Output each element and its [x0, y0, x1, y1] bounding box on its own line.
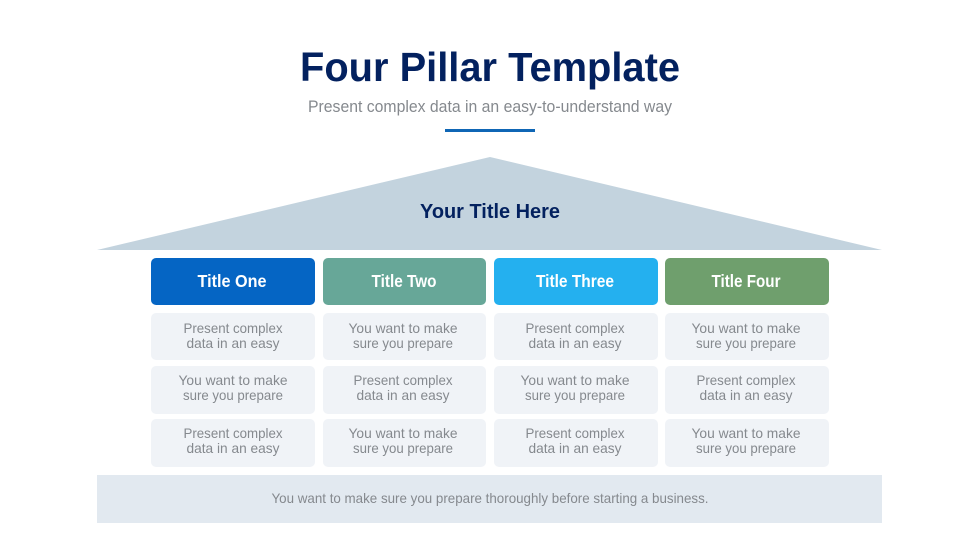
pillar 2 row 3 [323, 419, 486, 467]
pillar 2 [323, 258, 486, 467]
title: Four Pillar Template [300, 44, 680, 90]
pillar 2 row 3: You want to make [348, 425, 458, 441]
pillar 3 [494, 258, 658, 467]
pillar 2 row 3: sure you prepare [353, 440, 453, 456]
pillar 3 row 1: data in an easy [528, 335, 622, 351]
pillar 1 header: Title One [198, 271, 267, 291]
pillar 1 row 2 [151, 366, 315, 414]
pillar 3 row 1 [494, 313, 658, 360]
roof: main title [97, 157, 882, 250]
pillar 2 row 2: data in an easy [356, 387, 450, 403]
pillar 1 row 1 [151, 313, 315, 360]
pillar 4 row 3: You want to make [692, 425, 801, 441]
pillar 3 row 3: data in an easy [528, 440, 622, 456]
pillar 1 [151, 258, 315, 467]
pillar 3 header: Title Three [536, 271, 614, 291]
pillar 2 row 1: sure you prepare [353, 335, 453, 351]
pillar 2 row 1: You want to make [348, 320, 458, 336]
pillar 3 row 2 [494, 366, 658, 414]
pillar 3 row 1: Present complex [526, 320, 624, 336]
pillar 1 row 2: sure you prepare [183, 387, 283, 403]
foundation bar: You want to make sure you prepare thoroughly before starting a business. [272, 490, 708, 506]
pillar 4 row 1 [665, 313, 829, 360]
pillar 4 header: Title Four [712, 271, 781, 291]
pillar 4 header [665, 258, 829, 305]
pillar 3 row 2: sure you prepare [525, 387, 625, 403]
pillar 1 row 1: Present complex [184, 320, 282, 336]
pillar 4 row 1: You want to make [692, 320, 801, 336]
roof: main title: Your Title Here [420, 201, 560, 223]
pillar 3 header [494, 258, 658, 305]
pillar 3 row 3: Present complex [526, 425, 624, 441]
pillar 4 row 3: sure you prepare [696, 440, 796, 456]
pillar 4 row 2 [665, 366, 829, 414]
pillar 2 row 1 [323, 313, 486, 360]
pillar 2 header: Title Two [372, 271, 436, 291]
pillar 1 header [151, 258, 315, 305]
foundation bar [97, 475, 882, 523]
pillar 4 row 1: sure you prepare [696, 335, 796, 351]
pillar 3 row 3 [494, 419, 658, 467]
pillar 1 row 2: You want to make [178, 372, 288, 388]
subtitle: Present complex data in an easy-to-understand way [308, 98, 673, 116]
pillar 4 row 3 [665, 419, 829, 467]
pillar 4 row 2: data in an easy [700, 387, 792, 403]
pillar 1 row 1: data in an easy [186, 335, 280, 351]
pillar 2 row 2 [323, 366, 486, 414]
pillar 1 row 3: data in an easy [186, 440, 280, 456]
pillar 1 row 3: Present complex [184, 425, 282, 441]
pillar 4 [665, 258, 829, 467]
pillar 2 header [323, 258, 486, 305]
title underline [445, 129, 535, 132]
pillar 4 row 2: Present complex [696, 372, 796, 388]
pillar 3 row 2: You want to make [520, 372, 630, 388]
pillar 1 row 3 [151, 419, 315, 467]
pillar 2 row 2: Present complex [354, 372, 452, 388]
